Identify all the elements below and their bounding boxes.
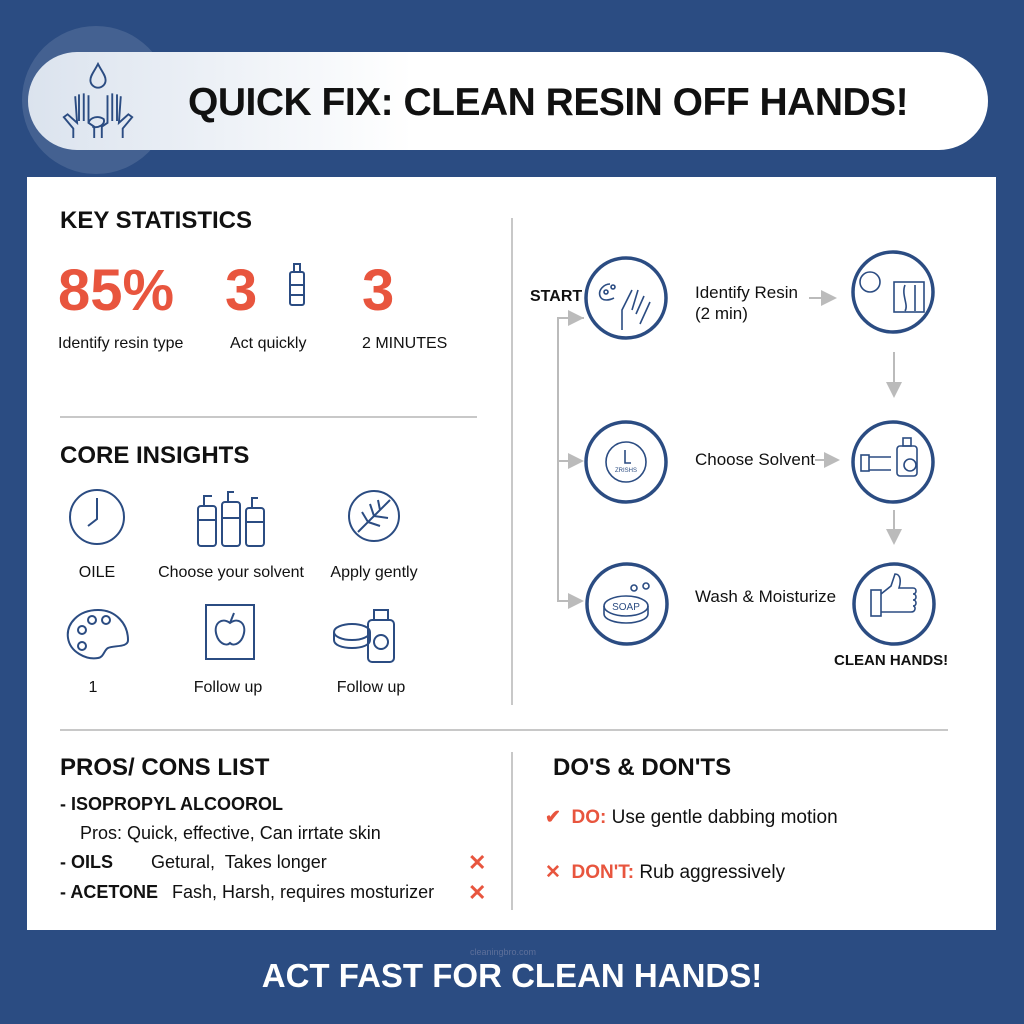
flowchart: ZRISHS — [615, 468, 637, 474]
do line: ✔ DO: Use gentle dabbing motion — [545, 807, 838, 828]
label: identify resin: Identify Resin — [695, 283, 798, 302]
panel: pros cons: - ISOPROPYL ALCOOROL — [60, 794, 283, 814]
panel: key statistics: Act quickly — [230, 335, 306, 352]
heading: DO'S & DON'TS — [553, 754, 731, 781]
panel: core insights — [60, 442, 418, 696]
icon: hands with drop — [62, 62, 134, 138]
footer: ACT FAST FOR CLEAN HANDS! — [262, 957, 762, 994]
icon: leaf — [348, 490, 400, 542]
watermark: cleaningbro.com — [470, 947, 536, 957]
panel: core insights: OILE — [79, 564, 115, 581]
panel: pros cons: - OILS Getural, Takes longer — [60, 852, 327, 872]
heading: KEY STATISTICS — [60, 207, 252, 234]
label: start: START — [530, 288, 582, 305]
panel: core insights: 1 — [89, 679, 97, 696]
heading: CORE INSIGHTS — [60, 442, 249, 469]
stat: 3: 3 — [225, 258, 257, 323]
main panel — [27, 177, 996, 930]
label: identify resin: (2 min) — [695, 304, 748, 323]
header banner — [28, 52, 988, 150]
panel: pros cons: - ACETONE Fash, Harsh, requires mosturizer — [60, 882, 434, 902]
panel: core insights: Apply gently — [330, 564, 418, 581]
panel: dos and donts — [545, 754, 838, 883]
icon: bottle — [289, 263, 305, 306]
title: QUICK FIX: CLEAN RESIN OFF HANDS! — [188, 81, 908, 124]
icon: bottles — [197, 491, 265, 547]
icon: x marks: ✕ — [468, 850, 486, 875]
icon: palette — [66, 609, 129, 660]
panel: key statistics: Identify resin type — [58, 335, 183, 352]
icon: x marks — [468, 850, 486, 905]
icon: x marks: ✕ — [468, 880, 486, 905]
dont line: ✕ DON'T: Rub aggressively — [545, 862, 785, 883]
stat: 3: 3 — [362, 258, 394, 323]
panel: core insights: Follow up — [194, 679, 262, 696]
label: identify resin — [695, 283, 798, 323]
label: clean hands: CLEAN HANDS! — [834, 652, 948, 669]
flowchart: SOAP — [612, 602, 640, 613]
heading: PROS/ CONS LIST — [60, 754, 269, 781]
stat: 85%: 85% — [58, 258, 174, 323]
icon: apple frame — [205, 604, 255, 660]
icon: jar and bottle — [333, 609, 395, 663]
panel: core insights: Follow up — [337, 679, 405, 696]
flowchart — [530, 250, 948, 669]
panel: key statistics: 2 MINUTES — [362, 335, 447, 352]
panel: core insights: Choose your solvent — [158, 564, 304, 581]
panel: key statistics — [58, 207, 447, 352]
label: choose solvent: Choose Solvent — [695, 450, 815, 469]
icon: clock — [69, 489, 125, 545]
label: wash: Wash & Moisturize — [695, 587, 836, 606]
header halo — [22, 26, 170, 174]
panel: pros cons: Pros: Quick, effective, Can irrtate skin — [80, 823, 381, 843]
panel: pros cons — [60, 754, 486, 905]
